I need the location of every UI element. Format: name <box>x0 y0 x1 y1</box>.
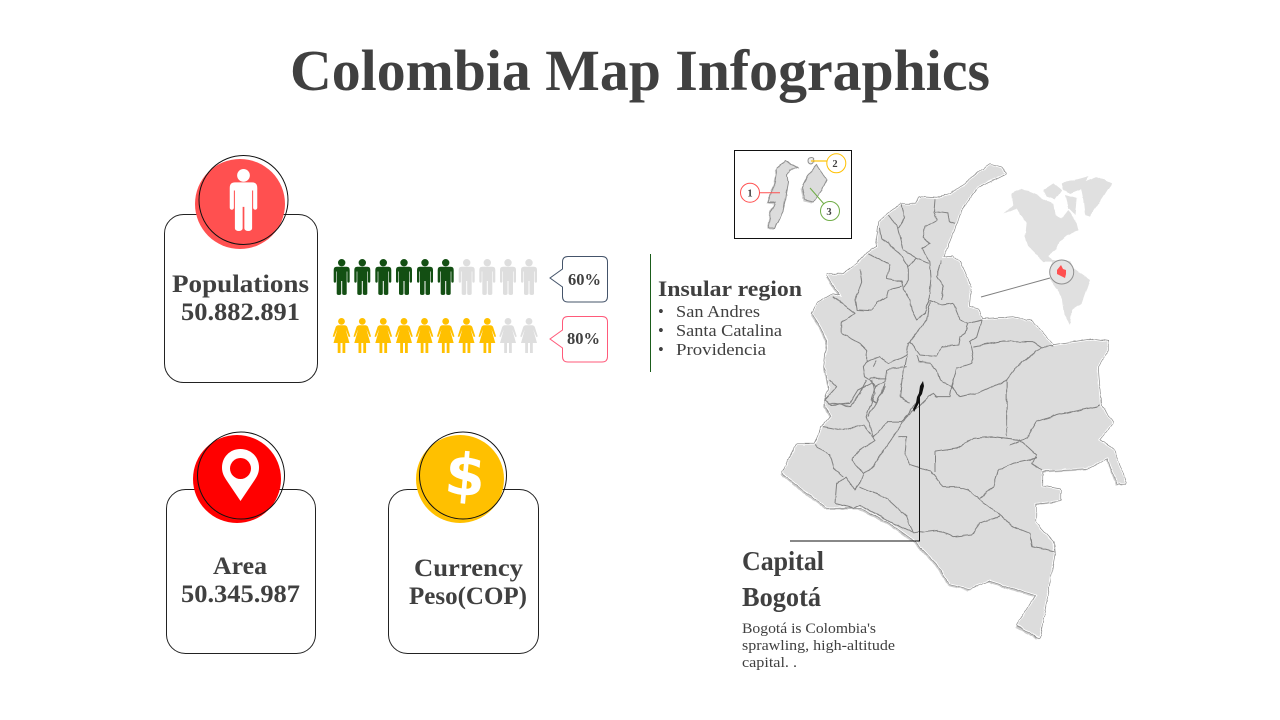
callout: 80%: 80% <box>567 329 600 348</box>
text block: capital: sprawling, high-altitude <box>742 638 895 654</box>
divider: insular region <box>650 254 652 372</box>
text: area value: Area <box>213 553 268 580</box>
marker 2: 2 <box>832 159 838 170</box>
map: outline and fill <box>781 165 1125 640</box>
card: area <box>166 490 316 654</box>
icon: location pin badge <box>193 432 284 523</box>
card: currency <box>388 490 538 654</box>
text block: insular region: • <box>658 321 664 340</box>
pictogram: women 80% <box>333 318 538 353</box>
marker: colombia <box>1057 265 1066 278</box>
marker 1: 1 <box>747 188 753 200</box>
callout: 60% <box>550 256 608 302</box>
panel: currency <box>388 432 538 654</box>
text: populations value <box>172 271 309 326</box>
icon: islands map <box>766 158 827 230</box>
text block: insular region: • <box>658 302 664 321</box>
text: currency value: Peso(COP) <box>409 583 527 610</box>
text: area value: 50.345.987 <box>181 581 300 608</box>
marker 3: 3 <box>826 207 832 218</box>
panel: populations <box>164 156 318 382</box>
map: americas <box>1003 176 1112 325</box>
callout: 60%: 60% <box>568 270 601 289</box>
leader line: capital <box>790 392 920 541</box>
text block: capital: Capital <box>742 546 824 576</box>
text: currency value <box>409 555 527 610</box>
locator line <box>981 278 1050 297</box>
text block: insular region: San Andres <box>676 302 760 321</box>
text block: capital: Bogotá is Colombia's <box>742 621 876 637</box>
text: populations value: 50.882.891 <box>181 299 300 326</box>
globe: world locator <box>981 176 1112 325</box>
icon: person badge <box>195 156 288 249</box>
text block: insular region <box>658 276 803 359</box>
locator lens <box>1050 260 1074 284</box>
icon: dollar badge <box>416 432 506 523</box>
pictogram: men 60% <box>334 259 537 295</box>
inset: islands <box>734 150 852 238</box>
text: populations value: Populations <box>172 271 309 298</box>
text: currency value: Currency <box>414 555 524 582</box>
text block: capital: capital. . <box>742 655 797 671</box>
marker: bogota region <box>913 381 924 412</box>
text block: capital: Bogotá <box>742 582 821 612</box>
text block: insular region: Santa Catalina <box>676 321 783 340</box>
text: area value <box>181 553 300 608</box>
title: Colombia Map Infographics <box>290 38 990 103</box>
text block: capital <box>742 546 895 671</box>
card: populations <box>164 214 318 382</box>
panel: area <box>166 432 316 654</box>
text block: insular region: Providencia <box>676 340 767 359</box>
text block: insular region: • <box>658 340 664 359</box>
map: colombia departments <box>781 165 1125 640</box>
text block: insular region: Insular region <box>658 276 803 301</box>
icon: dollar badge: $ <box>442 439 488 511</box>
callout: 80% <box>550 316 608 362</box>
